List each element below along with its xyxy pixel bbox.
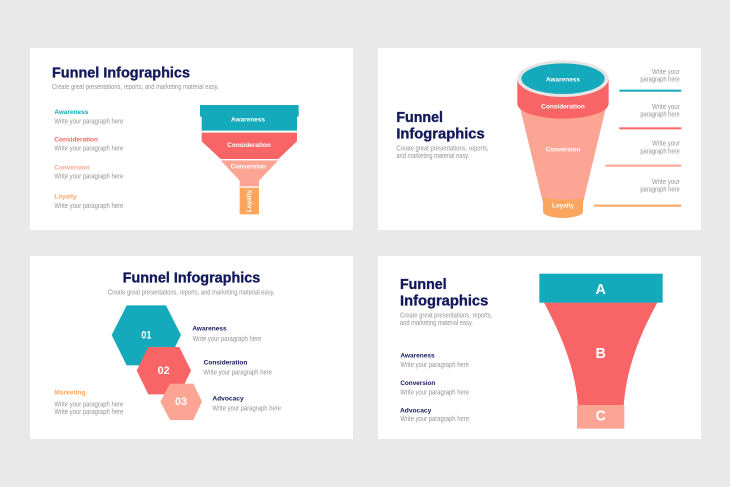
cone segment: loyalty: Loyalty [552, 203, 574, 210]
segment B [544, 303, 657, 406]
subtitle: Create great presentations, reports, and marketing material easy. [108, 289, 275, 296]
item: awareness: Write your paragraph here [400, 362, 469, 369]
cone funnel diagram [517, 60, 609, 218]
list item: loyalty: Write your paragraph here [54, 203, 123, 210]
list item: conversion: Write your paragraph here [54, 173, 123, 180]
panel: bottom-left hexagons [30, 256, 353, 439]
list item: loyalty: Loyalty [54, 194, 77, 201]
panel: top-left stacked funnel [30, 48, 353, 230]
item: advocacy: Write your paragraph here [400, 416, 469, 423]
funnel segment: loyalty: Loyalty [246, 190, 253, 212]
heading: Infographics [396, 126, 485, 142]
item: conversion: Write your paragraph here [400, 390, 469, 397]
item: conversion: Conversion [400, 380, 435, 387]
list item: consideration: Consideration [54, 137, 98, 144]
annotation 1 [619, 69, 681, 92]
segment C [577, 405, 624, 429]
subtitle: and marketing material easy. [400, 320, 473, 327]
item: advocacy: Advocacy [212, 396, 244, 403]
segment A: A [595, 282, 606, 298]
heading: Funnel Infographics [52, 66, 190, 82]
list item: consideration: Write your paragraph here [54, 146, 123, 153]
annotation 4 [594, 179, 681, 207]
annotation 3 [605, 141, 681, 167]
cone segment: awareness: Awareness [546, 76, 580, 83]
list item: loyalty [54, 194, 123, 210]
heading: Funnel [400, 277, 447, 293]
annotation 3: paragraph here [640, 148, 680, 155]
item: advocacy [400, 407, 469, 423]
heading: Funnel Infographics [123, 270, 260, 286]
subtitle [400, 313, 492, 327]
subtitle: Create great presentations, reports, [396, 146, 489, 153]
panel: top-right cone funnel [378, 48, 701, 230]
heading [396, 110, 485, 142]
annotation 4: paragraph here [640, 186, 680, 193]
funnel diagram [200, 105, 299, 214]
cone segment: awareness [521, 63, 605, 94]
cone segment: conversion: Conversion [546, 147, 580, 154]
list item: conversion: Conversion [54, 164, 90, 171]
hexagon 01: 01 [141, 330, 151, 342]
list item: awareness: Awareness [54, 109, 89, 116]
subtitle [396, 146, 489, 160]
heading [400, 277, 488, 309]
heading: Infographics [400, 293, 488, 309]
item: marketing: Write your paragraph here [54, 402, 123, 409]
hexagon 03: 03 [175, 396, 187, 408]
annotation 4: Write your [652, 179, 680, 186]
hexagon 01 [112, 305, 181, 365]
item: awareness: Write your paragraph here [193, 336, 261, 343]
item: consideration [203, 359, 272, 376]
segment A [539, 274, 663, 303]
item: awareness [400, 352, 469, 369]
cone segment: consideration [517, 79, 609, 119]
cone rim [517, 60, 609, 97]
subtitle: Create great presentations, reports, [400, 313, 492, 320]
funnel segment: consideration: Consideration [227, 142, 271, 149]
segment B: B [595, 346, 606, 362]
cone segment: loyalty [543, 197, 583, 218]
item: marketing: Marketing [54, 389, 86, 396]
item: consideration: Write your paragraph here [203, 369, 272, 376]
item: marketing [54, 389, 123, 416]
heading: Funnel [396, 110, 443, 126]
list item: awareness: Write your paragraph here [54, 118, 123, 125]
segment C: C [595, 408, 606, 424]
funnel segment: conversion: Conversion [231, 164, 266, 171]
item: consideration: Consideration [204, 359, 247, 366]
item: marketing: Write your paragraph here [54, 409, 123, 416]
funnel segment: awareness: Awareness [231, 116, 265, 123]
item: conversion [400, 380, 469, 397]
item: awareness: Awareness [192, 325, 227, 332]
hexagon 02: 02 [158, 365, 170, 377]
item: advocacy: Write your paragraph here [212, 405, 281, 412]
hexagon 03 [160, 384, 202, 420]
annotation 3: Write your [652, 141, 680, 148]
item: advocacy [212, 396, 281, 412]
annotation 1: Write your [652, 69, 680, 76]
list item: consideration [54, 137, 123, 153]
cone segment: conversion [519, 105, 607, 203]
annotation 2: Write your [652, 104, 680, 111]
subtitle: Create great presentations, reports, and marketing material easy. [52, 84, 219, 91]
panel: bottom-right curved funnel [378, 256, 701, 439]
item: awareness: Awareness [400, 352, 435, 359]
subtitle: and marketing material easy. [396, 153, 469, 160]
hexagon 02 [137, 347, 191, 394]
annotation 2 [619, 104, 681, 129]
item: advocacy: Advocacy [400, 407, 432, 414]
item: awareness [192, 325, 261, 343]
cone segment: consideration: Consideration [541, 104, 585, 111]
annotation 1: paragraph here [640, 76, 680, 83]
list item: awareness [54, 109, 123, 125]
annotation 2: paragraph here [640, 112, 680, 119]
list item: conversion [54, 164, 123, 180]
